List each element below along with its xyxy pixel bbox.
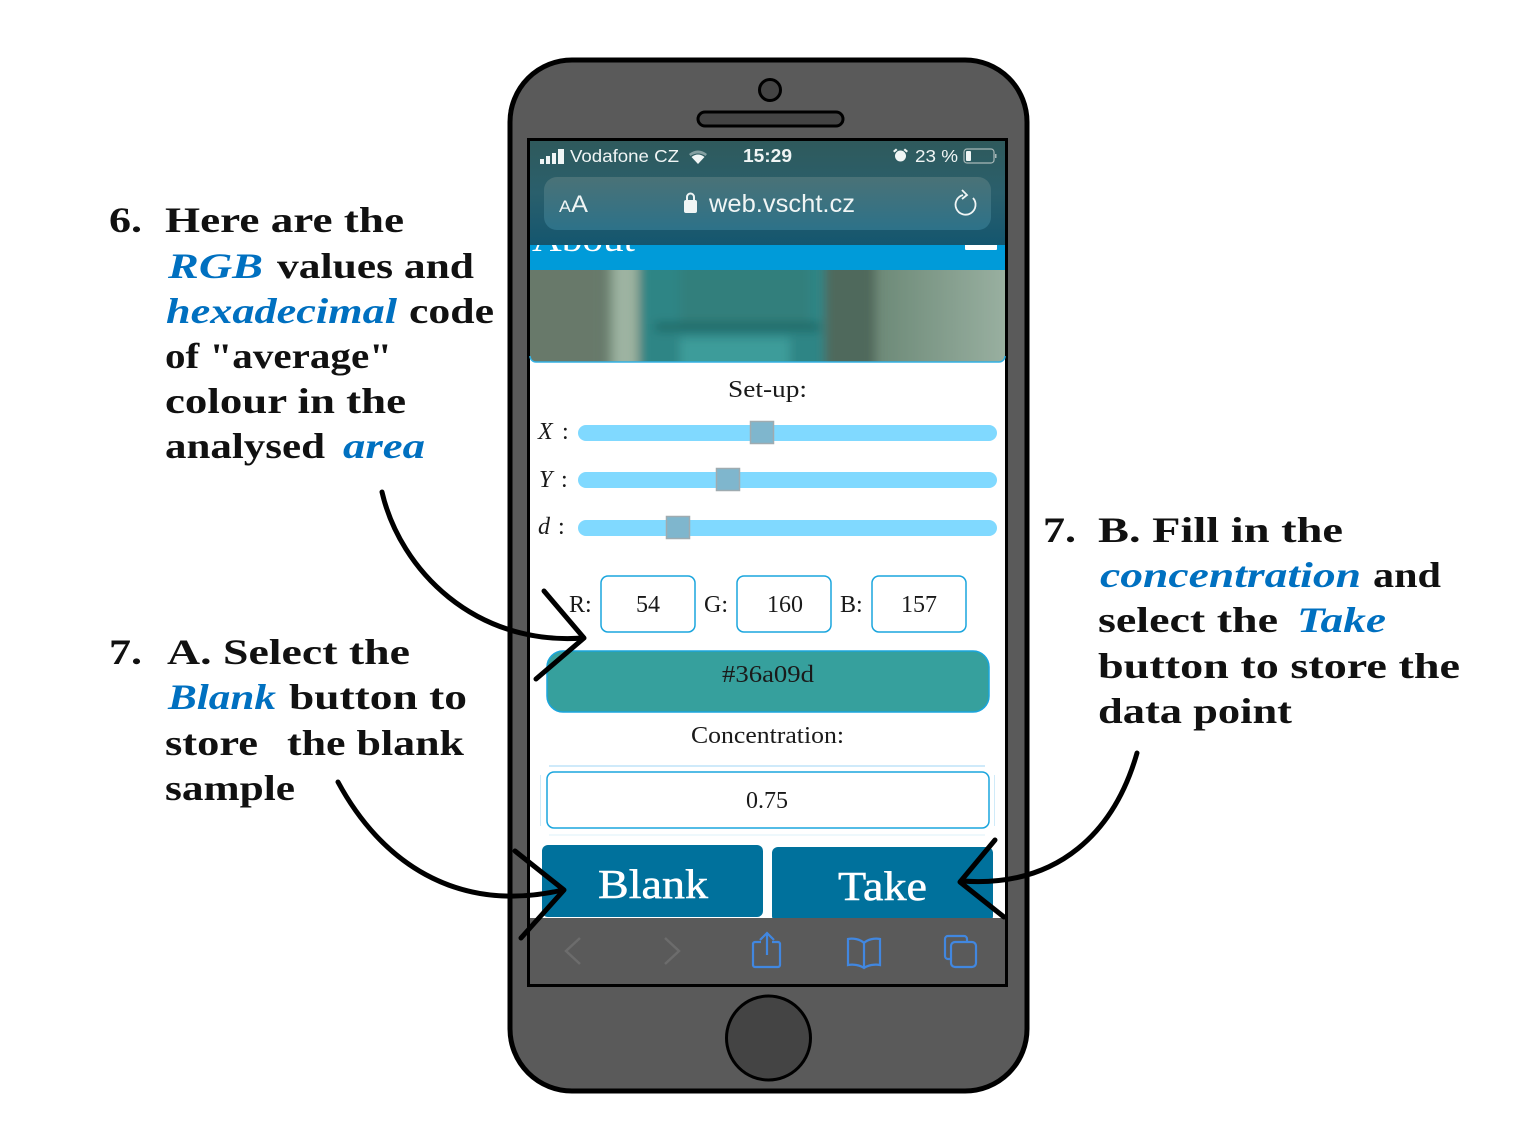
wifi icon: [689, 150, 707, 164]
RGB value fields: 160: [767, 592, 803, 618]
note 6: RGB values: of "average": [165, 336, 392, 376]
arrow to blank button: [338, 782, 564, 938]
note 7A: blank button: store: [165, 723, 258, 763]
RGB value fields: B:: [840, 592, 863, 618]
RGB value fields: R:: [569, 592, 592, 618]
slider d: [538, 514, 997, 540]
concentration input: [540, 766, 994, 835]
signal bars: [540, 149, 564, 164]
slider X: [537, 419, 997, 445]
phone body: [510, 60, 1027, 1091]
clipped About title: About: [532, 219, 635, 259]
carrier name: Vodafone CZ: [570, 146, 679, 166]
slider Y: Y: [539, 467, 555, 493]
note 7A: blank button: sample: [165, 768, 295, 808]
speaker: [698, 112, 843, 126]
screen background: [528, 140, 1006, 986]
RGB value fields: 54: [636, 592, 660, 618]
slider X: :: [562, 419, 569, 445]
alarm icon: [893, 148, 908, 162]
colour swatch with hex code: #36a09d: [722, 662, 814, 688]
note 7B: take button: and: [1373, 555, 1441, 595]
note 6: RGB values: analysed: [165, 426, 325, 466]
note 6: RGB values: 6.: [109, 200, 142, 240]
slider X: X: [537, 419, 554, 445]
browser status and address bar: [530, 141, 1005, 245]
blank button: Blank: [598, 861, 709, 907]
clipped About title: [532, 245, 997, 252]
note 7A: blank button: A. Select the: [167, 632, 410, 672]
app header band: [530, 245, 1005, 270]
bookmarks icon: [848, 939, 880, 968]
RGB value fields: 157: [901, 592, 937, 618]
note 7B: take button: B. Fill in the: [1098, 510, 1343, 550]
note 7A: blank button: Blank: [167, 677, 276, 717]
note 7B: take button: 7.: [1043, 510, 1076, 550]
arrow to RGB fields: [382, 492, 584, 679]
text size control: AA: [559, 191, 588, 218]
note 7A: blank button: [109, 632, 467, 808]
note 7A: blank button: button to: [289, 677, 467, 717]
note 7B: take button: data point: [1098, 691, 1292, 731]
slider Y: :: [561, 467, 568, 493]
address field: [544, 177, 991, 230]
clock: 15:29: [743, 146, 792, 166]
note 6: RGB values: RGB: [167, 246, 263, 286]
tabs icon: [945, 936, 976, 967]
concentration label: Concentration:: [691, 723, 844, 749]
battery percent: 23 %: [915, 146, 958, 166]
note 7B: take button: concentration: [1100, 555, 1361, 595]
back icon: [566, 938, 580, 964]
slider Y: [539, 467, 997, 493]
camera preview: [530, 270, 1005, 362]
forward icon: [665, 938, 679, 964]
take button: Take: [838, 863, 927, 909]
lock icon: [684, 194, 697, 213]
arrow to take button: [960, 753, 1137, 917]
RGB value fields: [569, 576, 966, 632]
note 6: RGB values: code: [409, 291, 494, 331]
concentration input: 0.75: [746, 788, 788, 814]
phone: [510, 60, 1027, 1091]
colour swatch with hex code: [547, 651, 989, 712]
note 7A: blank button: the blank: [287, 723, 464, 763]
url: web.vscht.cz: [708, 190, 855, 218]
note 6: RGB values: values and: [277, 246, 474, 286]
note 7B: take button: button to store the: [1098, 646, 1460, 686]
front camera: [760, 80, 780, 100]
note 7B: take button: select the: [1098, 600, 1278, 640]
take button: [772, 847, 993, 922]
slider d: d: [538, 514, 551, 540]
blank button: [542, 845, 763, 917]
browser toolbar: [530, 918, 1005, 984]
note 7B: take button: Take: [1297, 600, 1386, 640]
note 7A: blank button: 7.: [109, 632, 142, 672]
set-up label: Set-up:: [728, 377, 807, 403]
RGB value fields: G:: [704, 592, 728, 618]
slider d: :: [558, 514, 565, 540]
note 6: RGB values: colour in the: [165, 381, 406, 421]
camera preview border: [530, 356, 1005, 362]
note 6: RGB values: area: [343, 426, 425, 466]
note 6: RGB values: [109, 200, 494, 466]
battery icon: [964, 149, 996, 163]
share icon: [753, 933, 780, 967]
reload icon: [956, 190, 976, 215]
home button: [726, 996, 810, 1080]
note 7B: take button: [1043, 510, 1460, 731]
note 6: RGB values: hexadecimal: [166, 291, 397, 331]
note 6: RGB values: Here are the: [165, 200, 404, 240]
